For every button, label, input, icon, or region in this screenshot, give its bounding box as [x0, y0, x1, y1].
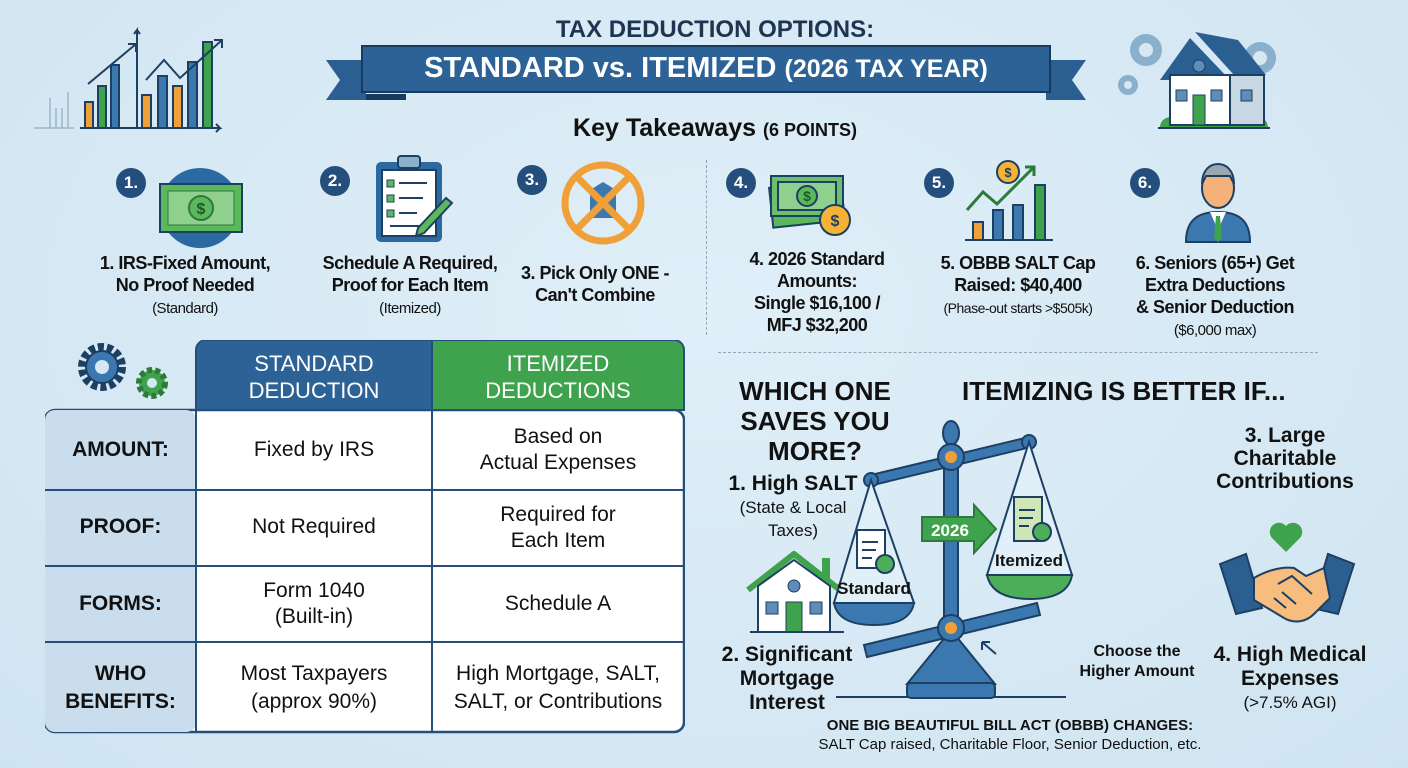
- footer note: OBBB: ONE BIG BEAUTIFUL BILL ACT (OBBB) CHANGES:: [827, 717, 1193, 734]
- takeaway 6: & Senior Deduction: [1136, 297, 1294, 317]
- takeaway 5: 5.: [932, 173, 946, 192]
- takeaway 5: (Phase-out starts >$505k): [944, 300, 1092, 316]
- item: charitable: Contributions: [1216, 470, 1354, 493]
- icon: gears left: [78, 343, 168, 399]
- row: who benefits: Most Taxpayers: [241, 662, 387, 685]
- header: itemized: DEDUCTIONS: [485, 378, 631, 403]
- row: proof: Each Item: [511, 529, 605, 552]
- item: medical: 4. High Medical: [1214, 643, 1366, 666]
- callout: choose the higher amount: Choose the: [1093, 643, 1181, 660]
- takeaway 6: [1130, 163, 1295, 339]
- heading: which one saves you more: WHICH ONE: [739, 376, 891, 406]
- takeaway 6: ($6,000 max): [1174, 322, 1256, 339]
- takeaway 4: $: [803, 188, 811, 204]
- callout: choose the higher amount: [1080, 643, 1194, 680]
- row: who benefits: [65, 662, 662, 713]
- row: who benefits: (approx 90%): [251, 690, 377, 713]
- row: proof: Required for: [500, 503, 616, 526]
- row: proof: [80, 503, 616, 552]
- scale illustration: Standard: [837, 579, 911, 598]
- takeaway 5: Raised: $40,400: [954, 275, 1082, 295]
- comparison table: [45, 340, 685, 734]
- footer note: OBBB: [818, 717, 1201, 753]
- item: mortgage: Interest: [749, 691, 825, 714]
- scale illustration: 2026: [931, 521, 969, 540]
- row: who benefits: SALT, or Contributions: [454, 690, 662, 713]
- row: who benefits: High Mortgage, SALT,: [456, 662, 660, 685]
- takeaway 1: No Proof Needed: [116, 275, 254, 295]
- row: forms: Form 1040: [263, 579, 365, 602]
- heading: which one saves you more: SAVES YOU: [740, 406, 890, 436]
- row: forms: FORMS:: [79, 592, 162, 615]
- takeaway 6: Extra Deductions: [1145, 275, 1285, 295]
- divider: vertical dashed: [706, 160, 707, 335]
- row: amount: [72, 425, 636, 474]
- row: who benefits: BENEFITS:: [65, 690, 176, 713]
- icon: house with gears: [1118, 32, 1276, 129]
- takeaway 6: 6. Seniors (65+) Get: [1136, 253, 1294, 273]
- row: amount: AMOUNT:: [72, 438, 169, 461]
- scale illustration: [832, 420, 1074, 699]
- heading: which one saves you more: [739, 376, 891, 466]
- heading: key takeaways: Key Takeaways (6 POINTS): [573, 114, 857, 142]
- takeaway 3: 3.: [525, 170, 539, 189]
- row: forms: Schedule A: [505, 592, 611, 615]
- takeaway 2: [320, 155, 497, 317]
- icon: handshake with heart: [1218, 522, 1356, 622]
- takeaway 2: Proof for Each Item: [332, 275, 488, 295]
- takeaway 3: 3. Pick Only ONE -: [521, 263, 669, 283]
- icon: house: [746, 550, 844, 633]
- row: amount: Fixed by IRS: [254, 438, 374, 461]
- item: charitable: Charitable: [1234, 447, 1336, 470]
- item: medical: Expenses: [1241, 667, 1339, 690]
- takeaway 3: Can't Combine: [535, 285, 655, 305]
- item: high salt: Taxes): [768, 521, 818, 540]
- footer note: OBBB: SALT Cap raised, Charitable Floor, Senior Deduction, etc.: [818, 736, 1201, 753]
- takeaway 1: [100, 168, 270, 317]
- icon: bar charts top-left: [34, 27, 223, 133]
- takeaway 2: Schedule A Required,: [323, 253, 497, 273]
- row: who benefits: WHO: [95, 662, 146, 685]
- takeaway 4: 4. 2026 Standard: [749, 249, 885, 269]
- item: mortgage: Mortgage: [740, 667, 834, 690]
- row: forms: (Built-in): [275, 605, 353, 628]
- takeaway 1: 1. IRS-Fixed Amount,: [100, 253, 270, 273]
- takeaway 4: 4.: [734, 173, 748, 192]
- header: itemized: [485, 351, 631, 403]
- banner: STANDARD vs. ITEMIZED (2026 TAX YEAR): [424, 52, 988, 84]
- row: proof: Not Required: [252, 515, 376, 538]
- takeaway 2: (Itemized): [379, 300, 441, 317]
- header: standard: STANDARD: [254, 351, 374, 376]
- takeaway 4: [726, 168, 885, 335]
- takeaway 4: Amounts:: [777, 271, 857, 291]
- takeaway 5: 5. OBBB SALT Cap: [941, 253, 1095, 273]
- item: mortgage: [722, 643, 852, 714]
- item: medical: [1214, 643, 1366, 712]
- takeaway 2: 2.: [328, 171, 342, 190]
- item: charitable: 3. Large: [1245, 424, 1325, 447]
- takeaway 1: (Standard): [152, 300, 218, 317]
- takeaway 1: $: [197, 201, 206, 218]
- takeaway 5: [924, 160, 1096, 316]
- row: forms: [79, 579, 611, 628]
- row: proof: PROOF:: [80, 515, 161, 538]
- header: standard: [249, 351, 379, 403]
- takeaway 4: MFJ $32,200: [767, 315, 867, 335]
- takeaway 6: 6.: [1138, 173, 1152, 192]
- banner: [326, 45, 1086, 100]
- row: amount: Actual Expenses: [480, 451, 636, 474]
- heading: which one saves you more: MORE?: [768, 436, 862, 466]
- heading: itemizing is better if: ITEMIZING IS BETTER IF...: [962, 376, 1286, 406]
- row: amount: Based on: [514, 425, 602, 448]
- item: medical: (>7.5% AGI): [1243, 693, 1337, 712]
- title: TAX DEDUCTION OPTIONS:: [556, 16, 874, 43]
- header: itemized: ITEMIZED: [507, 351, 609, 376]
- takeaway 5: $: [1004, 165, 1012, 180]
- item: high salt: (State & Local: [740, 498, 846, 517]
- takeaway 4: $: [831, 213, 840, 230]
- scale illustration: Itemized: [995, 551, 1063, 570]
- takeaway 3: [517, 162, 669, 305]
- header: standard: DEDUCTION: [249, 378, 379, 403]
- item: high salt: 1. High SALT: [728, 472, 858, 495]
- callout: choose the higher amount: Higher Amount: [1080, 663, 1194, 680]
- takeaway 4: Single $16,100 /: [754, 293, 880, 313]
- item: high salt: [728, 472, 858, 540]
- item: charitable: [1216, 424, 1354, 493]
- takeaway 1: 1.: [124, 173, 138, 192]
- item: mortgage: 2. Significant: [722, 643, 852, 666]
